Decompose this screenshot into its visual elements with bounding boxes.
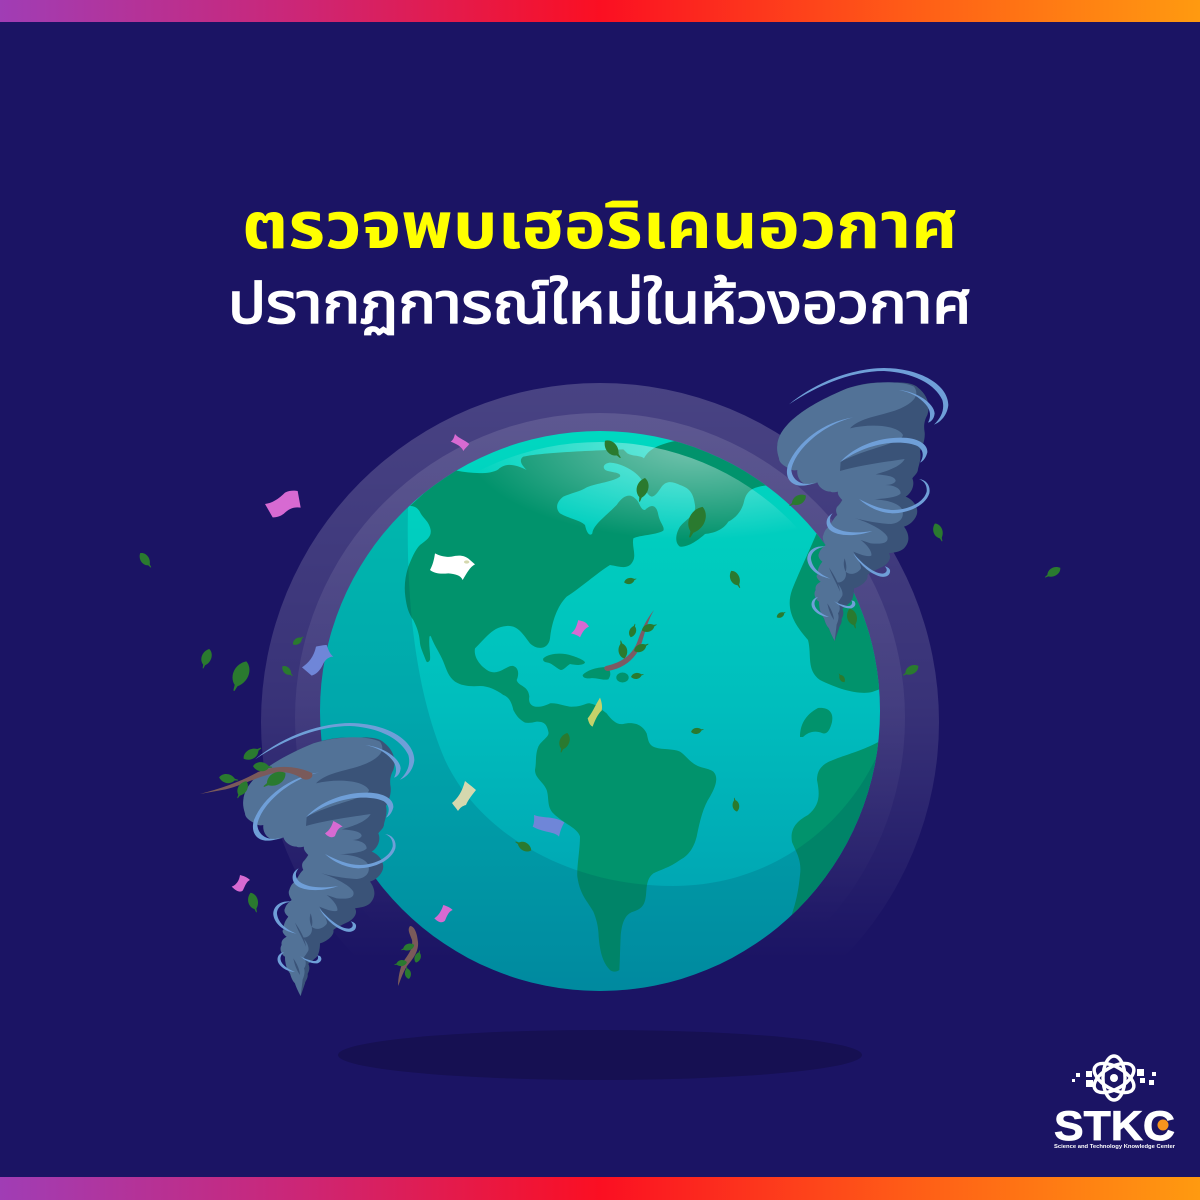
tornado: left — [243, 723, 414, 996]
bottom gradient bar — [0, 1177, 1200, 1200]
top highlight — [488, 442, 792, 534]
globe — [310, 420, 905, 1000]
halo rings — [261, 383, 939, 1061]
southern africa — [792, 742, 878, 915]
scrap: pink large — [265, 491, 301, 517]
branch: lower — [394, 926, 423, 986]
north and south america — [405, 441, 797, 972]
scrap: pink right of tornado — [434, 905, 453, 922]
scrap: blue left — [302, 645, 333, 676]
top gradient bar — [0, 0, 1200, 22]
scrap: cream — [452, 781, 476, 811]
scrap: white — [430, 553, 475, 580]
branch: left tornado — [200, 744, 312, 800]
branch: centre — [604, 610, 658, 671]
continents — [405, 441, 905, 972]
tornado: right — [777, 368, 948, 641]
globe shadow — [338, 1030, 862, 1080]
europe and north africa — [790, 534, 879, 693]
scrap: pink small top — [451, 434, 469, 451]
flying paper scraps — [232, 434, 602, 922]
scrap: pink centre — [571, 620, 589, 637]
scrap: pink left of tornado — [232, 875, 250, 892]
scrap: blue lower — [533, 815, 564, 837]
logo pixel squares — [1072, 1069, 1156, 1087]
caribbean islands — [543, 654, 610, 680]
logo: STKC — [1054, 1056, 1176, 1150]
scattered leaves — [137, 437, 1062, 914]
madagascar-like island — [800, 708, 832, 737]
logo atom icon — [1089, 1056, 1139, 1100]
subtitle: ปรากฏการณ์ใหม่ในห้วงอวกาศ — [228, 272, 972, 335]
scrap: pink on tornado — [325, 821, 343, 837]
scrap: yellow — [588, 698, 602, 727]
logo orange dot — [1158, 1120, 1168, 1130]
logo tagline: Science and Technology Knowledge Center — [1054, 1144, 1176, 1150]
logo wordmark: STKC — [1054, 1102, 1175, 1149]
lower shading — [320, 508, 876, 991]
title: ตรวจพบเฮอริเคนอวกาศ — [242, 189, 958, 262]
